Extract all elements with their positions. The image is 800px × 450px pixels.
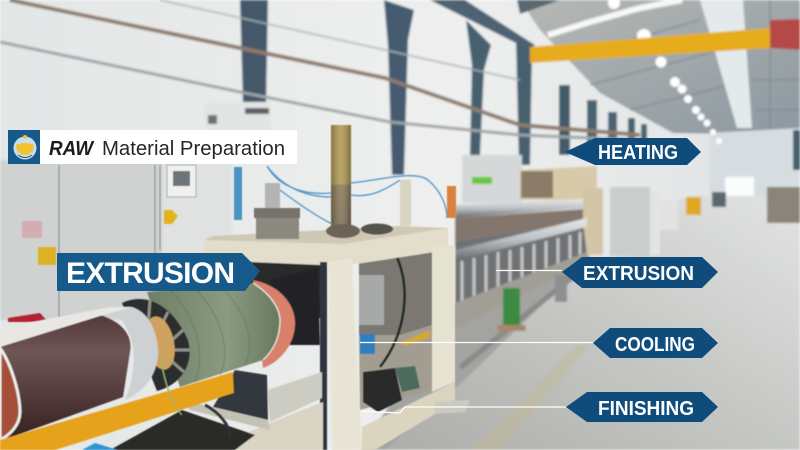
title bar [8, 130, 297, 164]
callout: EXTRUSION: EXTRUSION [583, 263, 694, 285]
callout: COOLING [360, 328, 718, 358]
title text: RAW: RAW [49, 138, 95, 160]
main label: EXTRUSION: EXTRUSION [66, 257, 235, 290]
callout: HEATING: HEATING [598, 142, 678, 164]
roller assembly [0, 268, 320, 450]
callout: FINISHING [361, 392, 718, 422]
vertical post and fittings [254, 125, 456, 239]
icon: emblem [8, 130, 40, 164]
callout: COOLING: COOLING [615, 334, 695, 356]
callout: FINISHING: FINISHING [598, 398, 694, 420]
callout: HEATING [565, 138, 701, 165]
callout: EXTRUSION [496, 257, 718, 288]
machine frame [82, 226, 470, 450]
title text: Material Preparation: Material Preparation [102, 138, 285, 160]
